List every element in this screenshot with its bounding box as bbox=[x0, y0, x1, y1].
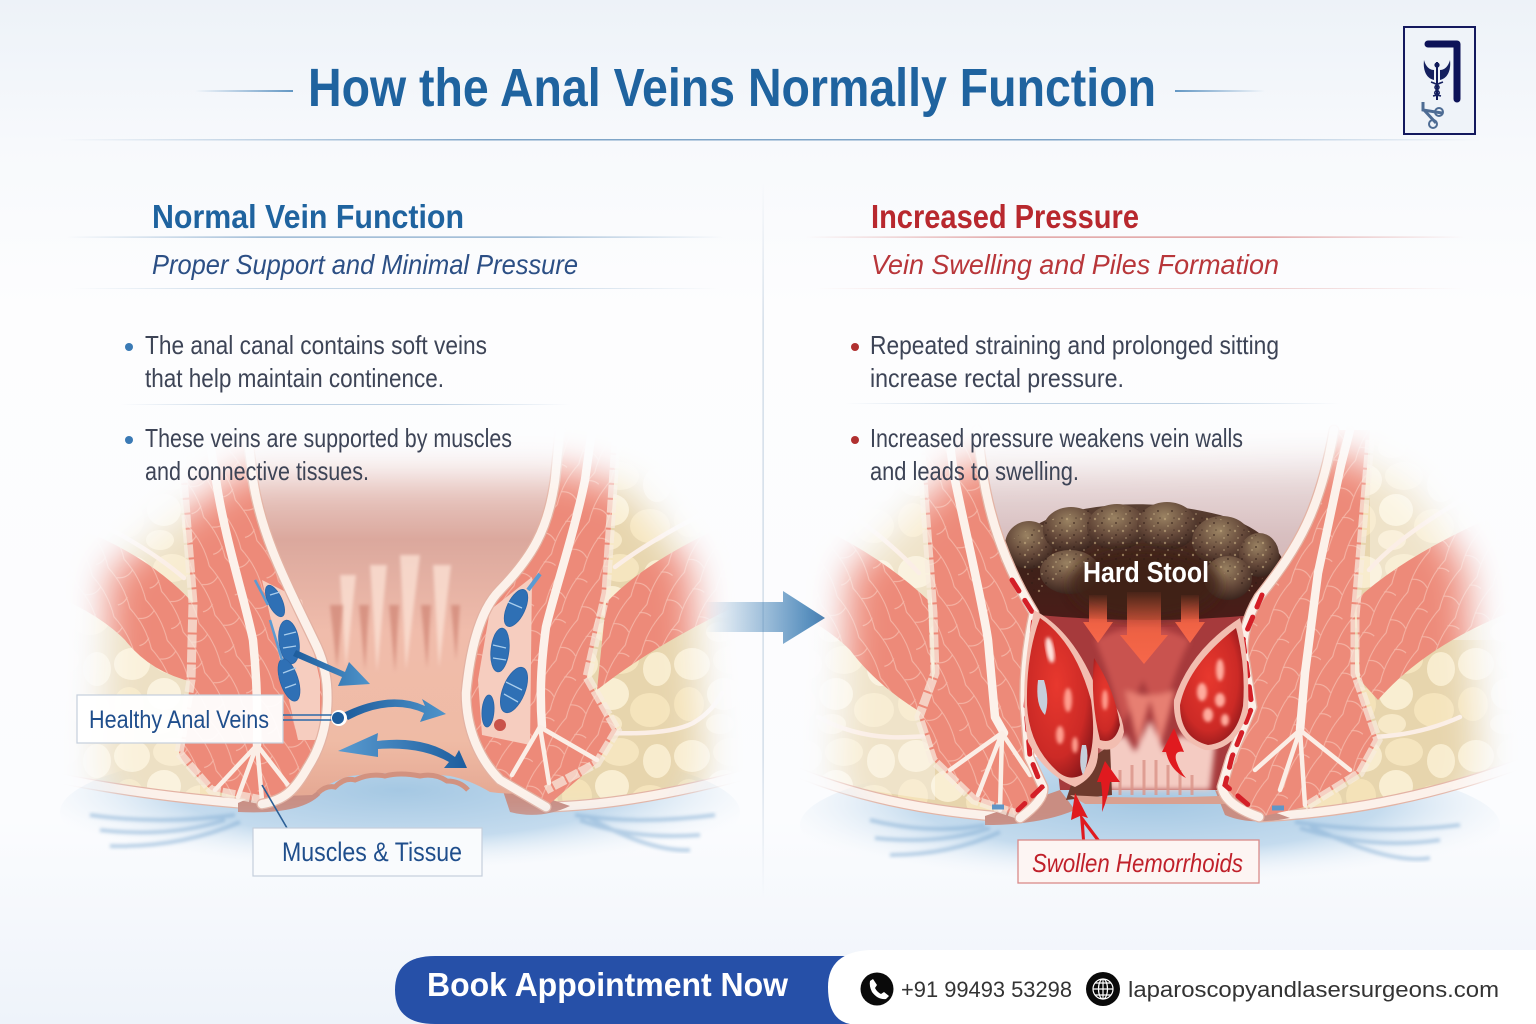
icon: phone bbox=[860, 972, 894, 1006]
left pillar muscle bbox=[919, 430, 1043, 817]
left pillar muscle bbox=[179, 454, 322, 802]
outer muscles bbox=[822, 544, 932, 712]
bullet text: weakened walls bbox=[851, 423, 1243, 486]
label: healthy anal veins: Healthy Anal Veins bbox=[89, 706, 269, 734]
bullet text: soft veins: The anal canal contains soft veins bbox=[145, 330, 487, 360]
anal canal bbox=[256, 455, 552, 796]
canal walls bbox=[977, 430, 1043, 818]
label: healthy anal veins bbox=[77, 695, 347, 743]
logo bbox=[1404, 27, 1475, 134]
muscle fans bbox=[215, 727, 597, 800]
white tissue bands bbox=[208, 430, 257, 745]
contact bar bbox=[828, 950, 1536, 1024]
veins: left side bbox=[255, 580, 304, 704]
swollen hemorrhoid: right bbox=[1174, 618, 1248, 750]
blue base shading bbox=[800, 753, 1500, 897]
panel: normal vein function bbox=[65, 198, 725, 486]
tissue under pillars bbox=[238, 792, 570, 815]
subheading: vein swelling: Vein Swelling and Piles Formation bbox=[871, 249, 1279, 280]
heading: increased pressure: Increased Pressure bbox=[871, 198, 1139, 235]
bullet text: muscle support: and connective tissues. bbox=[145, 456, 369, 486]
vein beds bbox=[262, 580, 320, 740]
website: laparoscopyandlasersurgeons.com bbox=[1128, 977, 1499, 1002]
dashed red vessels bbox=[1012, 580, 1042, 810]
button: book appointment: Book Appointment Now bbox=[427, 966, 788, 1003]
button: book appointment bbox=[395, 956, 850, 1024]
canal folds bbox=[340, 555, 451, 672]
label: swollen hemorrhoids bbox=[1018, 840, 1259, 883]
tissue under pillars bbox=[985, 790, 1290, 825]
subheading: proper support: Proper Support and Minimal Pressure bbox=[152, 249, 578, 280]
bullet text: weakened walls: Increased pressure weakens vein walls bbox=[870, 423, 1243, 453]
fat tissue bbox=[82, 468, 724, 802]
bullet text: straining: Repeated straining and prolonged sitting bbox=[870, 330, 1279, 360]
label: muscles and tissue: Muscles & Tissue bbox=[282, 837, 462, 867]
bullet text: soft veins: that help maintain continence. bbox=[145, 363, 444, 393]
bullet text: muscle support: These veins are supported by muscles bbox=[145, 423, 512, 453]
swollen hemorrhoid: left bbox=[1024, 610, 1124, 787]
canal interior bbox=[986, 436, 1326, 557]
arrows: red swelling pointers bbox=[1071, 728, 1186, 840]
label: muscles and tissue bbox=[253, 785, 482, 876]
bullet text: muscle support bbox=[125, 423, 512, 486]
blue streaks bbox=[870, 820, 1460, 859]
bullet text: soft veins bbox=[125, 330, 487, 393]
hard stool label: Hard Stool bbox=[1083, 557, 1209, 589]
veins: right side bbox=[481, 574, 540, 727]
blue base shading bbox=[60, 740, 740, 884]
arrow: curved flow bbox=[343, 699, 446, 722]
arrow: transition between panels bbox=[705, 591, 825, 644]
canal walls bbox=[247, 430, 327, 804]
illustration: healthy anatomy bbox=[73, 446, 728, 856]
panel: increased pressure bbox=[805, 198, 1465, 486]
arrow: vein flow down bbox=[293, 650, 370, 686]
illustration: increased pressure anatomy bbox=[814, 431, 1500, 868]
right pillar muscle bbox=[1222, 430, 1378, 817]
rugged canal edge bbox=[318, 774, 468, 793]
bullet text: weakened walls: and leads to swelling. bbox=[870, 456, 1079, 486]
muscle fans bbox=[950, 730, 1350, 810]
arrow: double flow bbox=[338, 733, 467, 768]
right pillar muscle bbox=[472, 452, 617, 804]
blue streaks bbox=[90, 815, 715, 850]
title: How the Anal Veins Normally Function bbox=[308, 58, 1156, 118]
outer muscles bbox=[84, 544, 193, 681]
arrows: downward pressure bbox=[1083, 592, 1205, 664]
hard stool bbox=[1005, 504, 1282, 620]
icon: globe bbox=[1086, 972, 1120, 1006]
white tissue bands bbox=[948, 430, 1004, 733]
small blue marks bbox=[992, 807, 1284, 808]
heading: normal vein function: Normal Vein Function bbox=[152, 198, 464, 235]
phone number: +91 99493 53298 bbox=[901, 977, 1072, 1002]
label: swollen hemorrhoids: Swollen Hemorrhoids bbox=[1032, 848, 1243, 878]
bullet text: straining bbox=[851, 330, 1279, 393]
fat tissue bbox=[822, 451, 1500, 811]
bullet text: straining: increase rectal pressure. bbox=[870, 363, 1124, 393]
